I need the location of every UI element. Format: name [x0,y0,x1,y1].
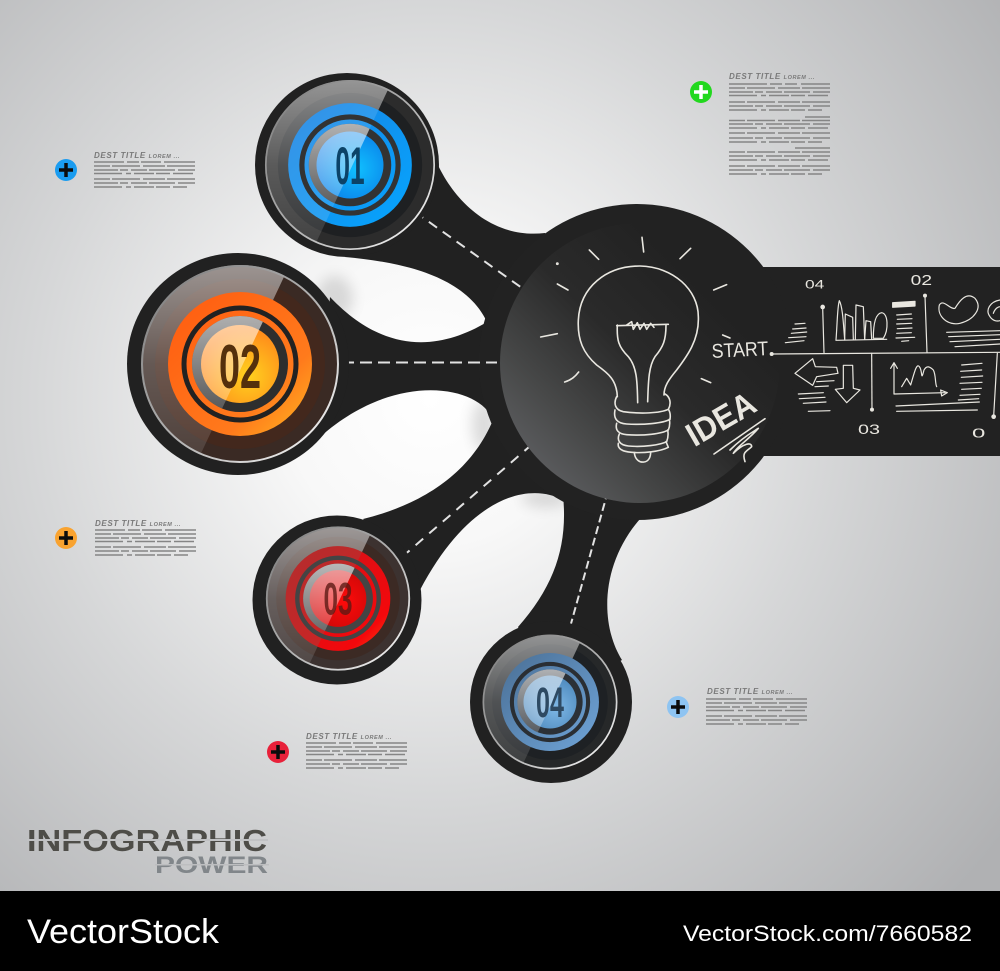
backing circle [127,253,349,475]
timeline: 0 [972,426,985,440]
glass lens [265,526,410,671]
backing circle [252,516,422,684]
sketch band [740,267,1000,456]
subtitle: POWER [155,852,268,879]
footer url: VectorStock.com/7660582 [683,921,972,946]
panel: step 03 [252,516,422,684]
icon: plus blue [55,159,77,181]
icon: light bulb [578,266,698,462]
glass lens [140,264,339,464]
connector 02 [320,297,540,437]
timeline: 03 [858,422,880,437]
panel: step 02 [127,253,349,475]
mini bar chart sketch [785,301,915,343]
text block: blue note [94,151,195,187]
line chart sketch [891,363,983,411]
bulb and chart sketches [541,237,1000,462]
number: 04 [536,679,564,726]
connector 04 [518,495,640,702]
backing circle [255,73,439,257]
connector shadow [317,276,569,507]
title: INFOGRAPHIC [27,823,267,858]
glass lens [482,634,617,770]
connector 03 [363,420,580,590]
start label: START [711,338,769,363]
text block: green note: DEST TITLE LOREM ... [729,72,815,81]
icon: plus green [690,81,712,103]
hub inner disc [500,223,780,503]
text block: light blue note [706,687,807,724]
icon: plus red [267,741,289,763]
connector 01 [345,150,600,322]
icon: plus light blue [667,696,689,718]
icon: plus orange [55,527,77,549]
dashed road 04 [567,498,606,638]
dashed road 03 [402,447,529,557]
footer bar [0,891,1000,971]
text block: red note [306,732,407,768]
glass lens: 01 [335,137,365,196]
connector network [317,150,640,702]
arrows sketch [795,359,860,411]
number: 02 [219,333,261,402]
idea label: IDEA [680,385,763,454]
dashed road 01 [415,212,522,288]
backing circle [470,621,632,783]
panel: step 04 [470,621,632,783]
text block: blue note: DEST TITLE LOREM ... [94,151,180,160]
footer brand: VectorStock [27,913,220,951]
dashed road 02 [342,362,497,364]
pie sketch [939,296,1000,347]
timeline: 02 [911,272,932,289]
glass lens [264,79,435,251]
panel: step 01 [255,73,439,257]
text block: green note [729,72,830,174]
icon: bulb rays [541,237,730,383]
hub circle [479,204,795,520]
timeline: 04 [805,277,825,291]
text block: light blue note: DEST TITLE LOREM ... [707,687,793,696]
text block: red note: DEST TITLE LOREM ... [306,732,392,741]
text block: orange note [95,519,196,555]
text block: orange note: DEST TITLE LOREM ... [95,519,181,528]
number: 03 [323,573,353,624]
timeline [770,272,1000,440]
